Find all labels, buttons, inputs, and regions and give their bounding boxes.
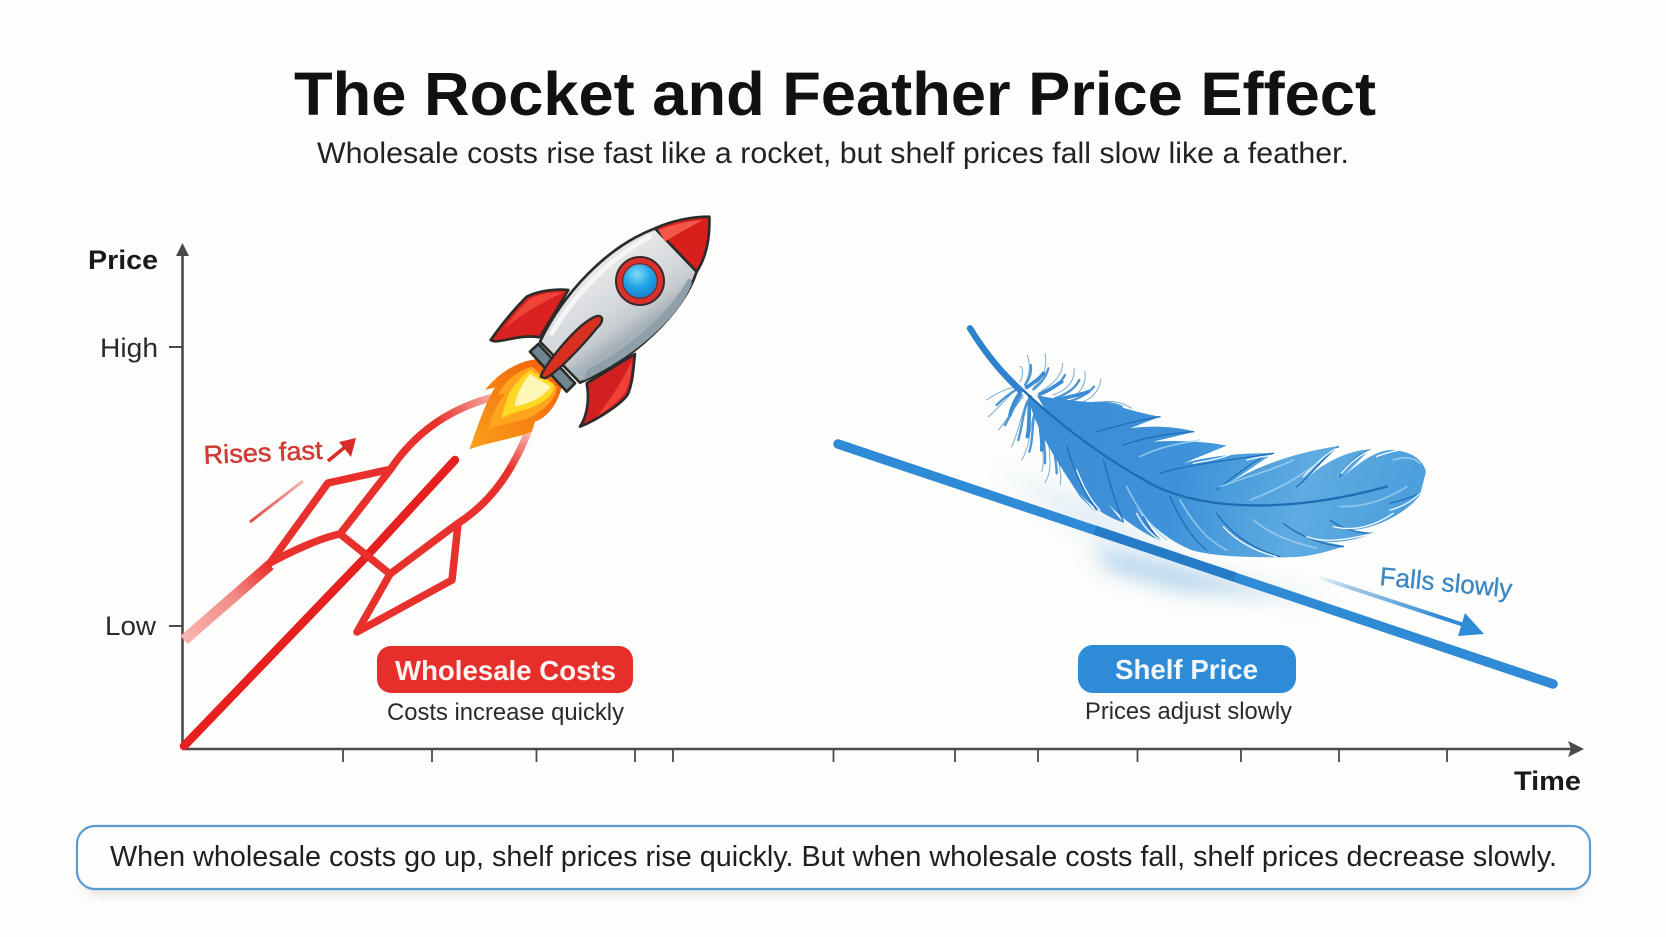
feather barbs light xyxy=(1077,448,1420,557)
y axis label: Price: Price xyxy=(88,245,158,275)
summary text: When wholesale costs go up, shelf prices rise quickly. But when wholesale costs fall, shelf prices decrease slowly. xyxy=(110,841,1557,873)
chart axes xyxy=(169,243,1584,762)
subtitle: Wholesale costs rise fast like a rocket, but shelf prices fall slow like a feather. xyxy=(317,137,1349,170)
icon: rocket xyxy=(469,217,709,449)
rises fast arrow xyxy=(328,438,356,461)
shelf price pill text: Shelf Price xyxy=(1115,654,1258,685)
rocket left fin xyxy=(491,290,568,341)
rocket body xyxy=(540,228,697,383)
rocket nozzle xyxy=(530,344,575,392)
shelf price line xyxy=(838,444,1553,684)
feather upper vane xyxy=(1037,395,1426,506)
falls slowly label: Falls slowly xyxy=(1378,561,1514,604)
feather fluff xyxy=(987,353,1132,485)
feather quill xyxy=(970,328,1020,390)
icon: feather xyxy=(970,328,1426,557)
rocket window xyxy=(616,257,664,305)
rises fast label: Rises fast xyxy=(203,435,324,470)
feather shadow xyxy=(1000,470,1330,600)
y axis label: High: High xyxy=(100,333,158,363)
shelf price caption: Prices adjust slowly xyxy=(1085,698,1292,725)
title: The Rocket and Feather Price Effect xyxy=(294,60,1376,128)
rocket nose xyxy=(655,217,709,272)
y axis label: Low: Low xyxy=(105,611,157,641)
wholesale costs caption: Costs increase quickly xyxy=(387,699,624,726)
feather soft highlights xyxy=(1127,440,1420,550)
summary box xyxy=(77,826,1590,889)
wholesale costs pill text: Wholesale Costs xyxy=(395,655,616,686)
feather lower vane xyxy=(1027,393,1426,557)
falls slowly arrow xyxy=(1318,577,1484,636)
feather shaft xyxy=(970,328,1387,505)
x axis label: Time: Time xyxy=(1514,766,1581,796)
rocket centre fin xyxy=(541,316,602,378)
summary box shadow xyxy=(82,836,1584,894)
wholesale cost rocket-shaped trail xyxy=(184,398,530,746)
shelf price pill xyxy=(1078,645,1296,693)
feather barbs dark xyxy=(1067,417,1420,557)
rocket flame xyxy=(469,359,562,449)
wholesale costs pill xyxy=(377,646,633,693)
rocket right fin xyxy=(580,354,635,427)
